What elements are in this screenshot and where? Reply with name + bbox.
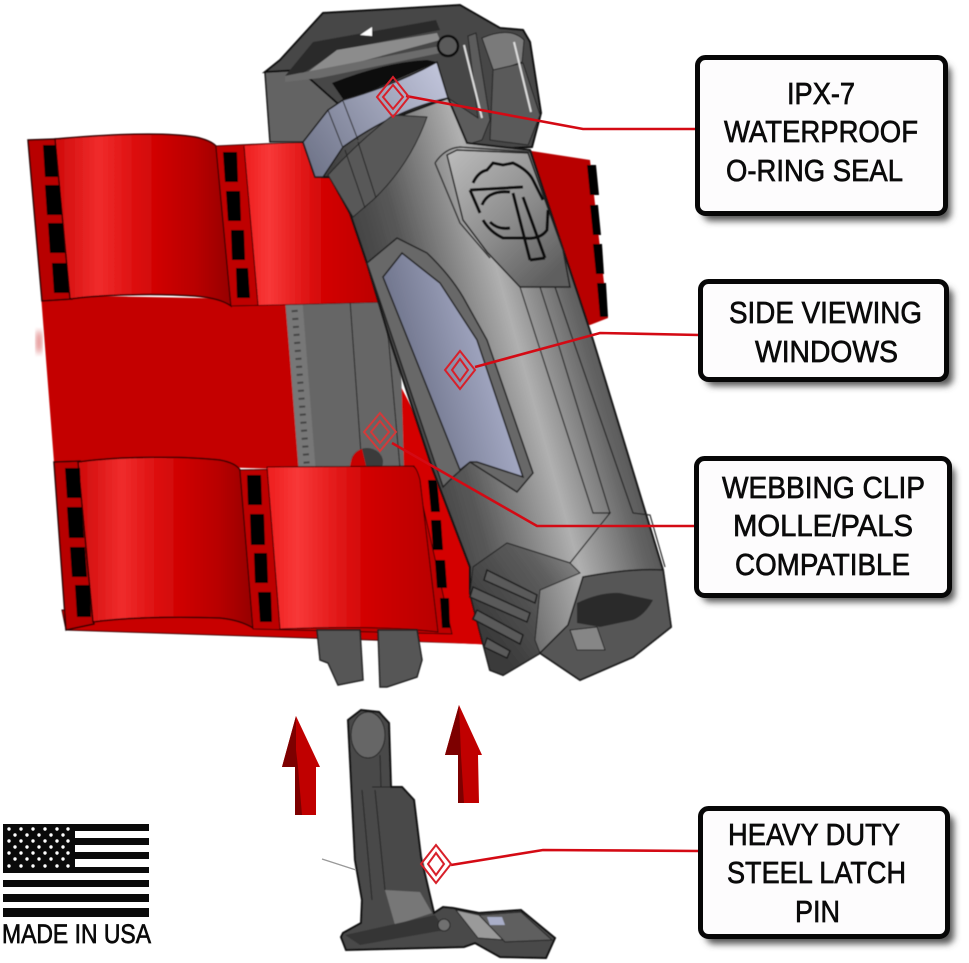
callout: IPX-7: O-RING SEAL [726,153,903,188]
lower strap right section [240,466,452,634]
lower strap left loop [78,457,253,628]
leader: webbing clip [364,413,697,526]
callout: latch pin [700,808,954,944]
main body shell [323,98,671,680]
callout: latch pin: HEAVY DUTY [728,817,900,852]
logo gear mark [470,163,548,260]
rear right red sheet [525,150,608,325]
callout: side viewing windows: SIDE VIEWING [729,295,922,330]
grip ridges [470,570,537,658]
callout: side viewing windows [700,282,953,386]
steel latch pin [341,710,555,958]
lower red strip under straps [62,610,492,644]
callout: latch pin: PIN [795,894,840,929]
clip slots [43,145,608,628]
bottom opening [540,570,671,680]
lower strap left clip [54,461,94,630]
smudge at webbing left edge [36,330,42,354]
top lid [265,5,541,150]
side ribs [473,287,665,567]
holster body [265,5,671,687]
upper strap left loop [55,134,231,306]
leader: o-ring [377,77,697,129]
callout: side viewing windows: WINDOWS [755,334,898,369]
leader: latch pin [421,845,699,883]
callout: webbing clip: COMPATIBLE [735,547,910,582]
lower feet [317,630,422,687]
upper strap left clip [28,139,72,301]
upper strap right section [216,142,385,306]
arrow: right up [445,705,482,803]
callout: latch pin: STEEL LATCH [727,855,906,890]
callout: IPX-7 [698,58,951,221]
leader: windows [445,333,700,389]
upper left back plate [265,60,345,142]
arrow: left up [282,716,320,815]
callout: IPX-7: IPX-7 [787,76,855,111]
callout: webbing clip [696,458,955,602]
callout: webbing clip: MOLLE/PALS [733,508,913,543]
callout: IPX-7: WATERPROOF [724,114,918,149]
thin grey line near latch [322,859,356,870]
callout: webbing clip: WEBBING CLIP [722,470,925,505]
lower grip cap [470,543,580,675]
O-ring collar [303,62,448,177]
made in USA caption: MADE IN USA [2,919,151,949]
rear webbing sheet [41,295,312,470]
logo panel [435,147,570,287]
side viewing window frame [367,238,533,492]
side viewing window [383,253,523,477]
flag: USA monochrome [3,824,149,917]
holster back plate [285,296,404,476]
collar lower dark section [328,115,427,217]
webbing panel: red straps [28,134,608,645]
red behind lower body [392,370,495,645]
